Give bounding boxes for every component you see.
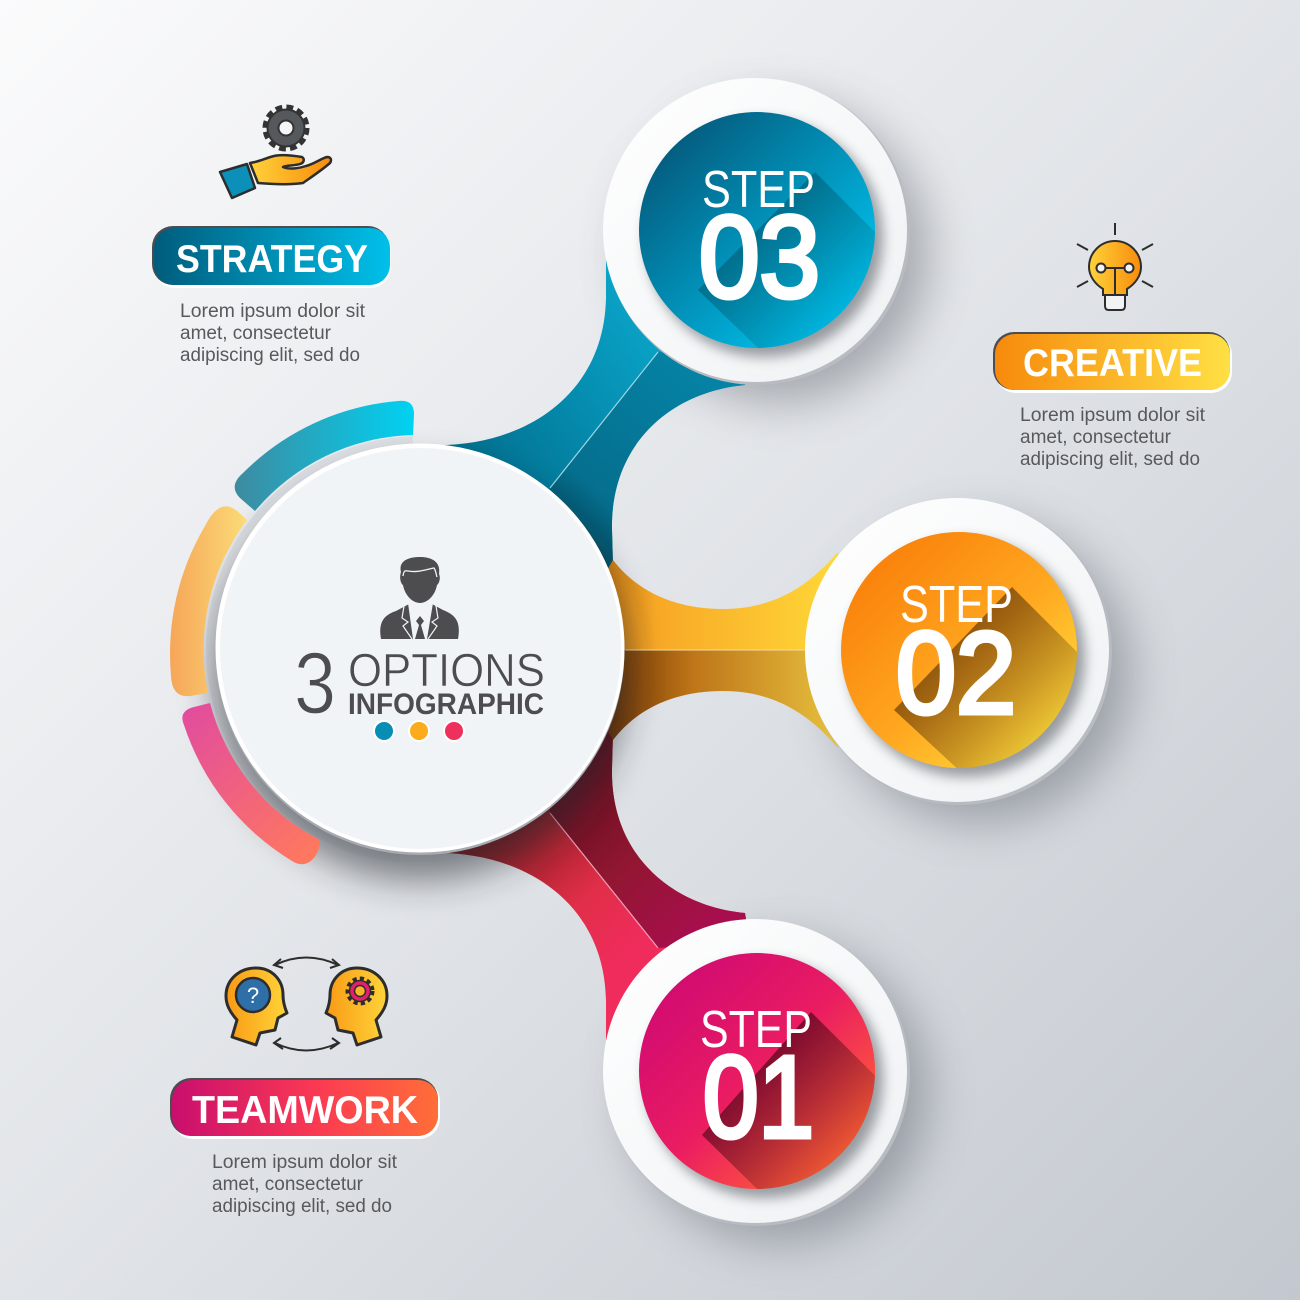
- panel: step 03: 03: [699, 192, 820, 322]
- label: teamwork: TEAMWORK: [192, 1089, 418, 1132]
- main circle halo and shadow: [206, 436, 634, 880]
- text: creative description: [1020, 405, 1206, 470]
- icon: two heads exchanging ideas: [226, 958, 387, 1050]
- panel: central circle: [216, 444, 624, 855]
- connector: amber band to step 02: [560, 552, 838, 748]
- text: teamwork description: adipiscing elit, sed do: [212, 1196, 392, 1217]
- text: teamwork description: amet, consectetur: [212, 1174, 364, 1195]
- text: strategy description: Lorem ipsum dolor sit: [180, 301, 366, 322]
- arc: orange segment: [170, 506, 247, 696]
- label: strategy: [152, 226, 391, 288]
- icon: gear over hand: [220, 108, 331, 198]
- icon: two heads exchanging ideas: ?: [247, 983, 259, 1008]
- title: 3 options infographic: 3: [294, 635, 336, 732]
- text: strategy description: amet, consectetur: [180, 323, 332, 344]
- arc: pink segment: [182, 703, 320, 864]
- connector: red band to step 01: [446, 731, 746, 1040]
- label: strategy: STRATEGY: [176, 238, 368, 281]
- arc: teal segment: [235, 401, 414, 511]
- text: creative description: amet, consectetur: [1020, 427, 1172, 448]
- panel: step 02: 02: [896, 608, 1016, 738]
- text: strategy description: adipiscing elit, sed do: [180, 345, 360, 366]
- title: 3 options infographic: INFOGRAPHIC: [348, 688, 544, 721]
- icon: light bulb: [1077, 223, 1153, 310]
- text: creative description: adipiscing elit, sed do: [1020, 449, 1200, 470]
- colour dots: [374, 721, 464, 741]
- icon: businessman: [380, 557, 459, 639]
- panel: step 02: [805, 498, 1112, 805]
- panel: step 01: [603, 919, 910, 1226]
- text: teamwork description: Lorem ipsum dolor sit: [212, 1152, 398, 1173]
- panel: step 01: 01: [703, 1032, 814, 1162]
- label: teamwork: [170, 1078, 440, 1139]
- title: 3 options infographic: OPTIONS: [348, 644, 545, 696]
- panel: step 03: STEP: [702, 161, 815, 219]
- panel: step 01: STEP: [700, 1001, 812, 1059]
- panel: step 03: [603, 78, 908, 384]
- text: teamwork description: [212, 1152, 398, 1217]
- text: strategy description: [180, 301, 366, 366]
- panel: step 02: STEP: [900, 576, 1013, 634]
- label: creative: [993, 332, 1232, 393]
- text: creative description: Lorem ipsum dolor sit: [1020, 405, 1206, 426]
- title: 3 options infographic: [294, 635, 545, 732]
- connector: teal band to step 03: [444, 260, 746, 568]
- shadows under step circles: [628, 102, 1130, 1242]
- label: creative: CREATIVE: [1023, 342, 1202, 385]
